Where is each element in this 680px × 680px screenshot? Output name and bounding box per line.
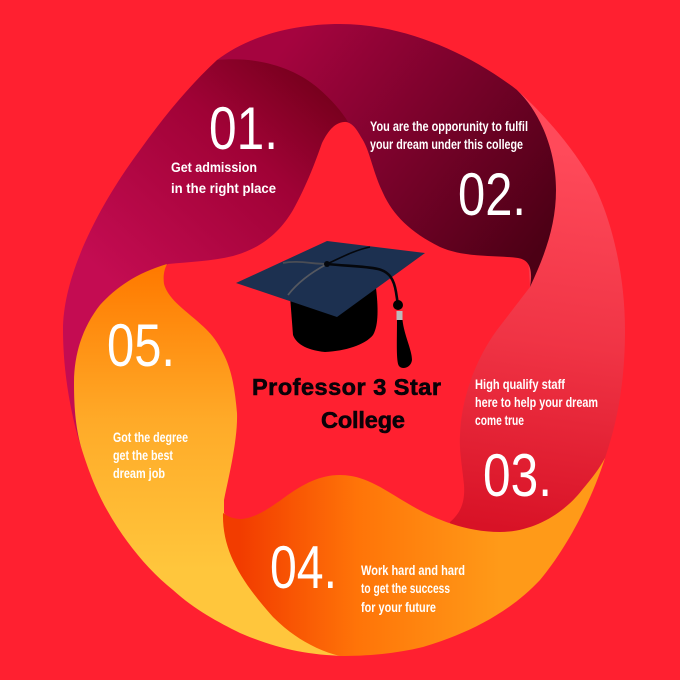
title: College: [321, 407, 405, 433]
icon: graduation cap: [236, 241, 425, 368]
panel: step 04: [223, 458, 605, 656]
step 04 number: 04.: [270, 534, 337, 601]
step 02 description: You are the opporunity to fulfil: [370, 118, 528, 134]
panel: step 03: [450, 90, 625, 550]
step 01 number: 01.: [209, 95, 278, 162]
panel: step 05: [74, 264, 345, 656]
step 05 description: [113, 429, 188, 481]
step 03 description: High qualify staff: [475, 376, 565, 392]
step 02 description: [370, 118, 528, 152]
step 03 description: [475, 376, 598, 428]
panel: step 01: [63, 59, 348, 450]
step 04 description: [361, 562, 465, 615]
step 04 description: to get the success: [361, 580, 450, 596]
title: Professor 3 Star: [252, 374, 441, 400]
title: [252, 374, 441, 433]
panel: step 02: [217, 24, 556, 287]
step 05 description: Got the degree: [113, 429, 188, 445]
step 04 description: for your future: [361, 599, 436, 615]
step 01 description: Get admission: [171, 159, 257, 175]
step 05 number: 05.: [107, 312, 175, 379]
step 04 description: Work hard and hard: [361, 562, 465, 578]
step 01 description: [171, 159, 276, 196]
step 02 number: 02.: [458, 161, 526, 228]
step 03 description: here to help your dream: [475, 394, 598, 410]
step 05 description: dream job: [113, 465, 165, 481]
step 03 description: come true: [475, 412, 524, 428]
step 03 number: 03.: [483, 442, 552, 509]
step 05 description: get the best: [113, 447, 173, 463]
step 01 description: in the right place: [171, 180, 276, 196]
step 02 description: your dream under this college: [370, 136, 523, 152]
